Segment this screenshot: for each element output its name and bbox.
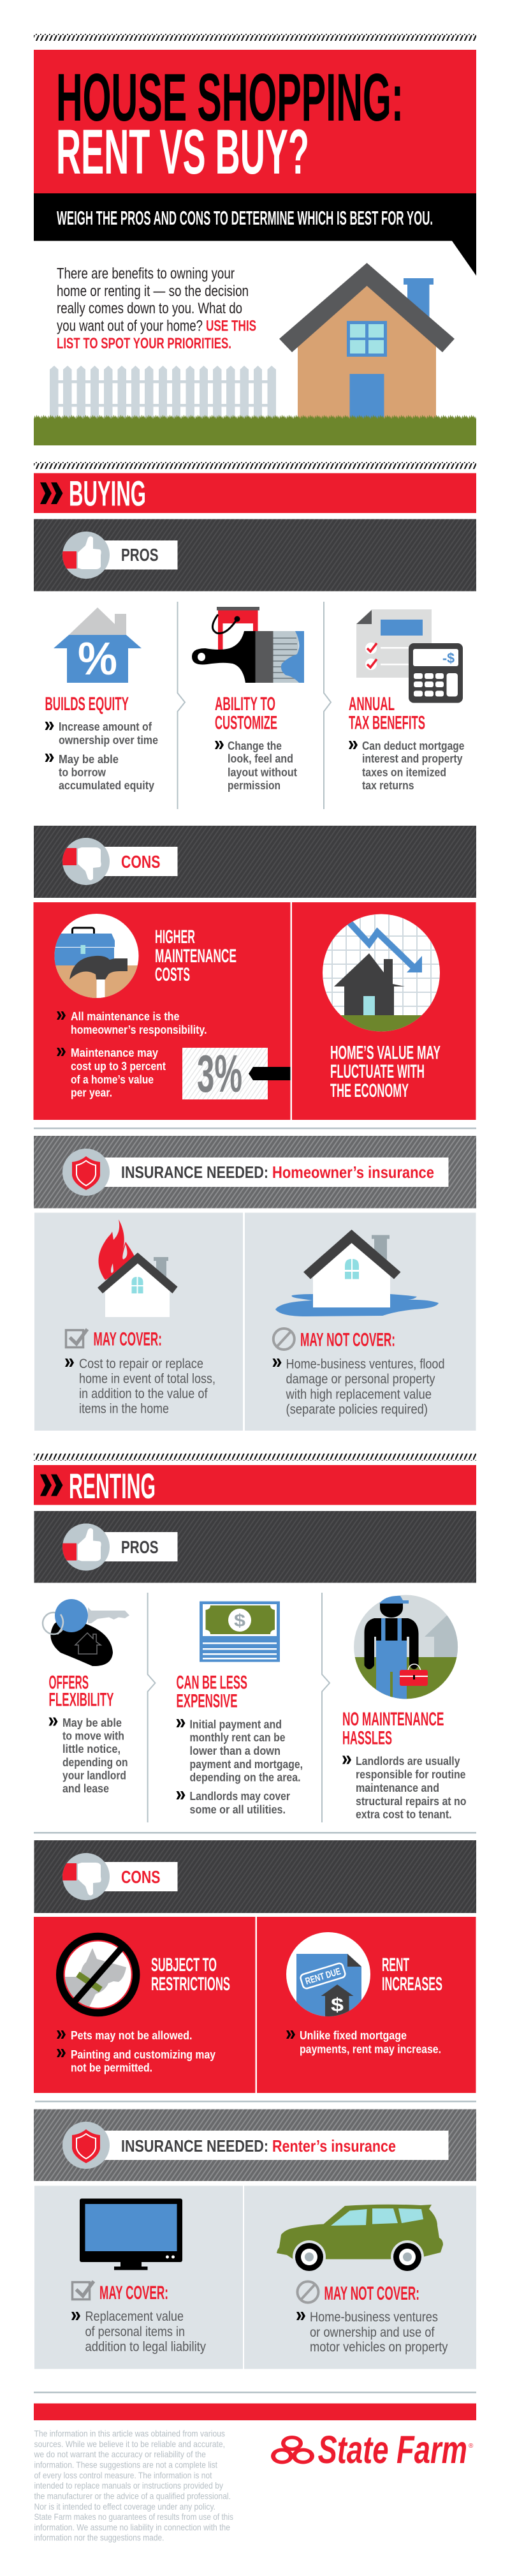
State Farm logo: ® (469, 2443, 474, 2450)
hatch divider (34, 1454, 476, 1461)
bullets: monthly rent can be (190, 1731, 286, 1744)
bullets (176, 1718, 303, 1816)
icon: flooded house (275, 1230, 439, 1316)
heading: THE ECONOMY (330, 1080, 409, 1101)
icon: dollar bill stack (200, 1602, 280, 1662)
cons header: buying (34, 826, 476, 898)
insurance label: INSURANCE NEEDED: (121, 1163, 268, 1182)
heading (176, 1672, 247, 1711)
bullets: accumulated equity (59, 779, 154, 792)
bullets: Can deduct mortgage (362, 740, 464, 752)
panel: rent increases (257, 1917, 476, 2093)
heading: COSTS (155, 964, 190, 985)
bullets: Increase amount of (59, 720, 152, 733)
heading: RENT (382, 1954, 409, 1976)
bullets (349, 740, 464, 792)
may cover heading: MAY COVER: (99, 2282, 168, 2304)
cons label: CONS (121, 1867, 161, 1887)
panel: may not cover, renter (244, 2186, 476, 2369)
exclusions text: or ownership and use of (310, 2325, 435, 2340)
disclaimer text: Nor is it intended to effect coverage under any policy. (34, 2501, 215, 2512)
disclaimer text: intended to replace manuals or instructions provided by (34, 2480, 223, 2490)
heading: ABILITY TO (215, 694, 275, 715)
coverage text (65, 1357, 215, 1417)
bullets: to move with (62, 1729, 124, 1742)
bullets: Pets may not be allowed. (71, 2029, 193, 2042)
bullets: May be able (62, 1716, 122, 1729)
exclusions text: motor vehicles on property (310, 2340, 448, 2355)
bullets: and lease (62, 1782, 109, 1795)
top hatch divider (34, 34, 476, 41)
may cover heading (73, 2281, 168, 2304)
bullets: some or all utilities. (190, 1803, 286, 1816)
bullets (57, 1009, 207, 1099)
hatch divider (34, 462, 476, 469)
icon: key and tag (43, 1599, 129, 1666)
coverage text: of personal items in (85, 2325, 185, 2339)
intro text: There are benefits to owning your (57, 265, 235, 282)
heading: ANNUAL (349, 694, 395, 715)
bullets: homeowner’s responsibility. (71, 1023, 207, 1036)
title block (34, 50, 476, 193)
icon: television (80, 2199, 182, 2270)
pros label: PROS (121, 545, 158, 565)
disclaimer text: we do not warrant the accuracy or reliability of the (34, 2449, 206, 2459)
bullets: All maintenance is the (71, 1009, 180, 1023)
3 percent tag: 3% (197, 1044, 242, 1103)
bullets (57, 2029, 216, 2074)
may not cover heading (273, 1329, 395, 1350)
heading: BUILDS EQUITY (45, 694, 129, 715)
State Farm logo (271, 2428, 474, 2471)
icon: dollar bill stack: $ (234, 1611, 245, 1630)
insurance header: renter's (34, 2110, 476, 2181)
bullets: Landlords are usually (356, 1755, 460, 1768)
disclaimer text: the manufacturer or the advice of a qualified professional. (34, 2491, 231, 2501)
panel: offers flexibility (43, 1599, 129, 1795)
bullets: interest and property (362, 752, 463, 765)
may not cover heading (297, 2282, 419, 2304)
icon: falling house value chart (322, 914, 441, 1032)
heading (349, 694, 425, 734)
bullets: responsible for routine (356, 1768, 465, 1781)
heading: SUBJECT TO (151, 1954, 217, 1976)
exclusions text: (separate policies required) (286, 1403, 428, 1417)
bullets: little notice, (62, 1743, 120, 1755)
section banner: buying: BUYING (69, 473, 146, 513)
pros header: buying (34, 519, 476, 591)
may cover heading (66, 1329, 162, 1350)
exclusions text: with high replacement value (286, 1387, 432, 1402)
footer red band (34, 2403, 476, 2420)
disclaimer text: information. We assume no liability in connection with the (34, 2522, 230, 2532)
bullets: cost up to 3 percent (71, 1059, 166, 1073)
icon: document and calculator (356, 609, 463, 703)
bullets: Maintenance may (71, 1046, 159, 1059)
bullets: depending on the area. (190, 1771, 301, 1784)
bullets (286, 2029, 441, 2056)
icon: percent house: % (78, 634, 117, 685)
pros label: PROS (121, 1537, 158, 1557)
heading: OFFERS (48, 1672, 89, 1694)
bullets: May be able (59, 753, 119, 766)
heading: HASSLES (342, 1728, 392, 1748)
intro text: you want out of your home? (57, 318, 203, 334)
heading: MAINTENANCE (155, 946, 237, 967)
bullets: depending on (62, 1756, 127, 1769)
exclusions text: damage or personal property (286, 1372, 435, 1387)
intro text (57, 265, 256, 352)
bullets: structural repairs at no (356, 1795, 467, 1808)
coverage text: items in the home (79, 1401, 169, 1417)
bullets: permission (228, 779, 280, 792)
exclusions text (296, 2310, 448, 2355)
insurance header: homeowner's (34, 1136, 476, 1209)
icon: rent due notice: $ (331, 1995, 344, 2016)
heading (330, 1043, 441, 1101)
disclaimer text: information nor the suggestions made. (34, 2532, 164, 2542)
may not cover heading: MAY NOT COVER: (300, 1330, 395, 1350)
insurance type: Renter’s insurance (272, 2136, 396, 2155)
panel: may cover, homeowner (34, 1212, 243, 1431)
icon: rent due notice (286, 1932, 370, 2017)
bullets: Painting and customizing may (71, 2048, 216, 2061)
intro text: really comes down to you. What do (57, 300, 242, 317)
heading: INCREASES (382, 1974, 442, 1995)
bullets (48, 1716, 127, 1795)
exclusions text: Home-business ventures (310, 2310, 438, 2325)
panel: value may fluctuate (292, 902, 476, 1120)
panel: higher maintenance costs (33, 902, 291, 1120)
panel: ability to customize (192, 607, 304, 792)
section banner: renting (34, 1465, 476, 1506)
bullets: maintenance and (356, 1782, 439, 1794)
bullets: payments, rent may increase. (300, 2042, 441, 2056)
section banner: buying (34, 473, 476, 513)
icon: car (277, 2205, 443, 2274)
cons header: renting (34, 1840, 476, 1913)
panel: may not cover, homeowner (245, 1212, 476, 1431)
bullets: to borrow (59, 766, 106, 778)
heading: TAX BENEFITS (349, 712, 425, 734)
disclaimer text: The information in this article was obtained from various (34, 2429, 225, 2439)
heading: RESTRICTIONS (151, 1974, 230, 1995)
icon: maintenance worker (354, 1595, 458, 1701)
bullets: taxes on itemized (362, 766, 446, 778)
icon: thumbs down (62, 1853, 110, 1900)
coverage text: Replacement value (85, 2309, 184, 2324)
bullets (45, 720, 158, 792)
disclaimer text: State Farm makes no guarantees of results from use of this (34, 2512, 233, 2522)
bullets: Unlike fixed mortgage (300, 2029, 407, 2042)
bullets: tax returns (362, 779, 414, 792)
bullets: Landlords may cover (190, 1790, 290, 1803)
icon: no pets sign (60, 1936, 136, 2013)
heading (151, 1954, 230, 1995)
section banner: renting: RENTING (69, 1466, 156, 1506)
coverage text: Cost to repair or replace (79, 1357, 203, 1371)
heading: CAN BE LESS (176, 1672, 247, 1694)
coverage text: addition to legal liability (85, 2339, 206, 2355)
icon: percent house (54, 607, 142, 685)
bullets (215, 740, 297, 792)
disclaimer text: of every loss control measure. The information is not (34, 2470, 212, 2480)
icon: thumbs up (62, 532, 110, 579)
heading: HIGHER (155, 927, 195, 948)
panel: annual tax benefits (349, 609, 464, 792)
panel: builds equity (45, 607, 158, 792)
bullets: payment and mortgage, (190, 1758, 303, 1771)
bullets: extra cost to tenant. (356, 1808, 451, 1821)
heading: EXPENSIVE (176, 1691, 237, 1711)
heading (48, 1672, 113, 1710)
icon: shield (62, 2122, 110, 2169)
exclusions text: Home-business ventures, flood (286, 1357, 445, 1372)
bullets: Change the (228, 740, 282, 752)
icon: house on fire (98, 1219, 177, 1317)
may not cover heading: MAY NOT COVER: (324, 2283, 419, 2304)
bullets: not be permitted. (71, 2061, 152, 2074)
intro text: LIST TO SPOT YOUR PRIORITIES. (57, 335, 231, 352)
bullets (342, 1755, 467, 1821)
coverage text: in addition to the value of (79, 1387, 208, 1401)
heading: FLUCTUATE WITH (330, 1061, 425, 1082)
coverage text (71, 2309, 206, 2355)
icon: document and calculator: -$ (442, 650, 455, 666)
icon: shield (62, 1149, 110, 1196)
panel: subject to restrictions (34, 1917, 255, 2093)
insurance label: INSURANCE NEEDED: (121, 2136, 268, 2155)
title line two: RENT VS BUY? (56, 116, 309, 187)
bullets: your landlord (62, 1769, 126, 1782)
panel: no maintenance hassles (342, 1595, 467, 1821)
grass (34, 414, 476, 445)
bullets: ownership over time (59, 734, 158, 747)
disclaimer text: sources. While we believe it to be reliable and accurate, (34, 2439, 225, 2449)
icon: thumbs up (62, 1524, 110, 1571)
cons label: CONS (121, 852, 161, 872)
heading (342, 1709, 444, 1748)
subtitle speech banner (34, 193, 476, 276)
house illustration (279, 263, 455, 419)
insurance type: Homeowner’s insurance (272, 1163, 434, 1182)
bullets: layout without (228, 766, 297, 778)
icon: rent due notice: RENT DUE (304, 1966, 342, 1987)
heading (382, 1954, 442, 1995)
bullets: Initial payment and (190, 1718, 282, 1731)
exclusions text (273, 1357, 445, 1417)
bullets: of a home’s value (71, 1073, 154, 1086)
heading: CUSTOMIZE (215, 712, 277, 734)
heading (215, 694, 277, 734)
icon: paint can and brush (192, 607, 304, 683)
disclaimer text (34, 2429, 233, 2542)
panel: may cover, renter (34, 2186, 243, 2369)
intro text: USE THIS (206, 318, 256, 334)
pros header: renting (34, 1511, 476, 1582)
icon: thumbs down (62, 838, 110, 885)
icon: toolbox and hammer (54, 914, 139, 999)
picket fence (50, 366, 276, 419)
heading (155, 927, 237, 985)
intro text: home or renting it — so the decision (57, 283, 249, 300)
bullets: look, feel and (228, 752, 293, 765)
bullets: lower than a down (190, 1745, 280, 1757)
panel: can be less expensive (176, 1602, 303, 1816)
bullets: per year. (71, 1086, 112, 1099)
disclaimer text: information. These suggestions are not a complete list (34, 2459, 217, 2469)
may cover heading: MAY COVER: (93, 1329, 162, 1350)
heading: FLEXIBILITY (48, 1690, 113, 1710)
coverage text: home in event of total loss, (79, 1372, 215, 1386)
